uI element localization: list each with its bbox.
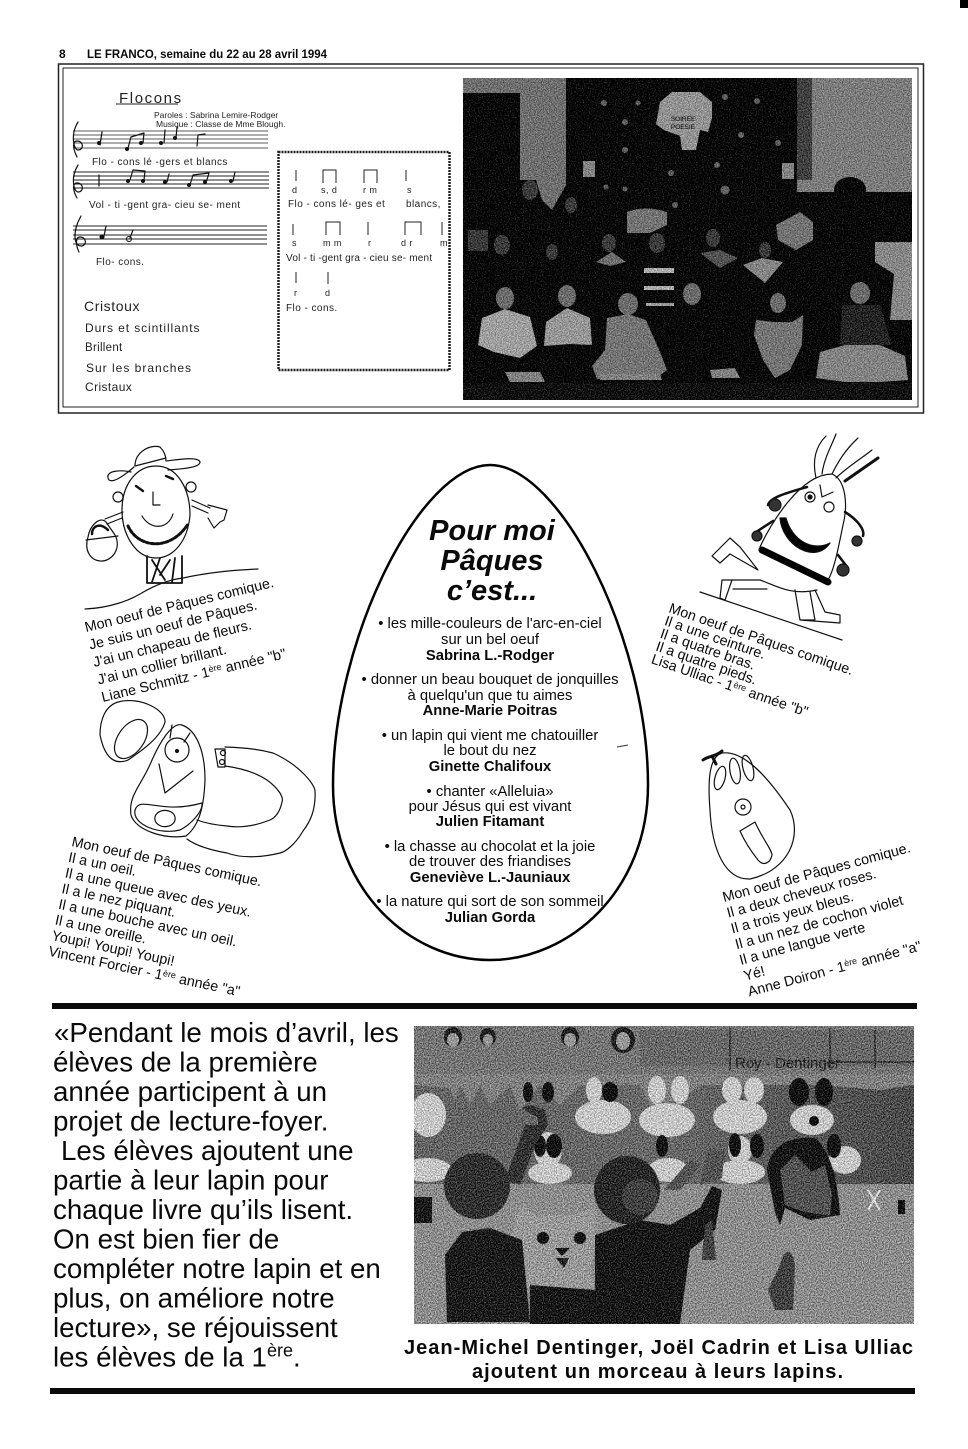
belt [762,550,828,582]
poem: Liane Schmitz: J'ai un collier brillant. [96,642,228,688]
article text [53,1017,399,1372]
upper wall band [414,1026,914,1074]
poem: Lisa Ulliac: ère [732,680,748,693]
article text: «Pendant le mois d’avril, les [54,1017,399,1048]
centre child [530,1186,722,1324]
poem: Cristaux [84,298,200,394]
poem: Vincent Forcier: Vincent Forcier - 1 [47,944,164,984]
entry: Anne-Marie: à quelqu'un que tu aimes [408,688,572,704]
lyrics line 1: Flo - cons lé -gers et blancs [92,157,228,168]
head [760,474,845,580]
logo shirt [468,230,488,251]
photo caption: Jean-Michel Dentinger, Joël Cadrin et Lisa Ulliac [404,1337,913,1359]
page header: LE FRANCO, semaine du 22 au 28 avril 1994 [87,47,327,61]
nose [735,799,751,815]
entry: Julien: • chanter «Alleluia» [427,784,553,800]
poem: Lisa Ulliac: Il a une ceinture. [662,613,767,663]
page header: 8 [59,47,66,61]
big ear [100,701,165,762]
egg drawing: Anne [703,751,794,879]
egg drawing: Vincent [100,701,315,857]
poem: Cristaux: Sur les branches [86,361,192,375]
egg head [709,753,794,879]
poem: Lisa Ulliac: Mon oeuf de Pâques comique. [667,601,855,679]
stripes [644,268,674,273]
mouth [135,803,202,831]
poem: Cristaux: Cristaux [85,380,132,394]
solfege box: Vol - ti -gent gra - cieu se- ment [286,253,432,264]
tongue [740,822,772,863]
face [142,492,173,526]
photo: children adding pieces to rabbits [402,1026,914,1324]
article text: compléter notre lapin et en [53,1253,381,1284]
solfege box: m m [323,238,342,248]
entry: Ginette: Ginette Chalifoux [429,759,552,775]
lower wall [414,1184,914,1324]
poem: Liane Schmitz [83,575,292,706]
entry: Geneviève: Geneviève L.-Jauniaux [410,870,571,886]
head [122,466,190,558]
poem: Liane Schmitz: Je suis un oeuf de Pâques. [87,598,259,653]
ground line [85,569,258,609]
backdrop stars and snowflake [656,92,712,150]
entry: Sabrina: • les mille-couleurs de l'arc-en-ciel [378,616,602,632]
article text: On est bien fier de [53,1224,279,1254]
poem: Lisa Ulliac: Il a quatre pieds. [654,639,759,688]
song title: Flocons [119,90,183,107]
entry: Sabrina: sur un bel oeuf [441,632,540,648]
egg heading: Pour moi [429,515,556,547]
eyes, nose [805,492,815,502]
entry: Julian: • la nature qui sort de son sommeil [376,894,604,910]
egg heading: c’est... [447,575,537,607]
poem: Vincent Forcier: ère [162,968,177,981]
legs [147,556,182,583]
eye and nose [165,738,189,762]
left child [445,1228,530,1322]
poem: Anne Doiron: ère [843,956,858,969]
three eyes [712,765,728,791]
song credits: Musique : Classe de Mme Blough. [156,119,285,129]
poem: Vincent Forcier: Il a le nez piquant. [60,881,177,921]
photo: children adding pieces to rabbits: Roy - Dentinger [735,1055,840,1072]
music staff 1 [73,122,268,157]
poem: Liane Schmitz: Mon oeuf de Pâques comique. [83,575,276,636]
poem: Cristaux: Durs et scintillants [85,321,200,335]
rabbit ears and bow ties [523,1078,841,1158]
poem: Vincent Forcier [47,834,265,1000]
entry: Ginette [382,728,598,775]
left wall [520,78,566,210]
entry: Julian [376,894,604,926]
article text: année participent à un [53,1076,327,1107]
poem: Anne Doiron: année "a" [856,939,923,971]
entry: Anne-Marie: Anne-Marie Poitras [423,703,557,719]
music staff 3 [73,216,267,252]
right wall [797,78,912,192]
hair [814,434,872,478]
egg outline [333,465,648,960]
entry: Julien: Julien Fitamant [436,814,544,830]
head [131,725,205,837]
entry: Geneviève: • la chasse au chocolat et la joie [385,839,595,855]
poem: Liane Schmitz: J'ai un chapeau de fleurs. [92,617,253,671]
poem: Vincent Forcier: Il a une bouche avec un oeil. [57,897,238,950]
poem: Lisa Ulliac: Il a quatre bras. [658,626,757,674]
photo caption [404,1337,913,1383]
egg heading: Pâques [440,545,544,577]
poem: Anne Doiron: Il a trois yeux bleus. [729,889,856,937]
poem: Vincent Forcier: année "a" [174,971,241,1000]
poem: Liane Schmitz: ère [207,662,222,674]
bottom rule [50,1388,915,1394]
ground line [700,592,842,640]
song credits [154,110,285,129]
rabbits [402,1076,861,1184]
portraits row [444,1027,635,1053]
solfege box: Flo - cons. [286,303,338,314]
panel: song and class photo frame [58,64,924,413]
photo caption: ajoutent un morceau à leurs lapins. [472,1361,843,1383]
solfege box: r m [363,185,377,195]
egg drawing: Liane [85,446,258,609]
entry: Geneviève: de trouver des friandises [409,854,571,870]
lyrics line 2: Vol - ti -gent gra- cieu se- ment [89,200,241,211]
article text: élèves de la première [53,1046,318,1078]
photo: class in front of Soirée Poésie backdrop [463,78,912,400]
poem: Liane Schmitz: année "b" [220,646,288,677]
poem: Anne Doiron: Mon oeuf de Pâques comique. [721,840,912,906]
music staff 2 [73,165,269,198]
poem: Lisa Ulliac [649,601,855,730]
poem: Lisa Ulliac: année "b" [743,684,810,720]
upper-row clothes [627,208,667,233]
hair tuft [703,751,722,764]
egg heading [429,515,556,607]
entry: Anne-Marie [362,672,618,719]
panel: Easter egg list [333,465,648,960]
solfege box: s [407,185,412,195]
front-row clothes [478,309,537,358]
article text: ère [267,1340,293,1360]
article text: plus, on améliore notre [53,1282,335,1314]
lyrics line 3: Flo- cons. [96,257,144,268]
entry: Sabrina: Sabrina L.-Rodger [426,648,554,664]
poem: Anne Doiron: Il a deux cheveux roses. [725,866,878,922]
entry: Ginette: le bout du nez [444,743,536,759]
solfege box: d [325,288,330,298]
article text: lecture», se réjouissent [53,1312,338,1343]
solfege box: Flo - cons lé- ges et [288,199,385,210]
article text: . [293,1342,301,1372]
poem: Anne Doiron: Il a un nez de cochon violet [734,893,905,953]
solfege box: r [368,238,371,248]
poem: Vincent Forcier: Il a une oreille. [54,913,148,948]
entry: Ginette: • un lapin qui vient me chatouiller [382,728,598,744]
poem: Anne Doiron: Il a une langue verte [738,920,867,969]
entry: Julien: pour Jésus qui est vivant [409,799,571,815]
solfege box: d r [401,238,413,248]
poem: Lisa Ulliac: Lisa Ulliac - 1 [649,652,735,695]
cat [510,1205,597,1288]
article text: projet de lecture-foyer. [53,1106,328,1136]
carrot row [414,1085,914,1185]
solfege box: d [292,185,297,195]
faces [494,180,771,260]
poem: Anne Doiron: Yé! [742,964,767,985]
song credits: Paroles : Sabrina Lemire-Rodger [154,110,278,120]
entry: Julian: Julian Gorda [445,910,536,926]
photo: class in front of Soirée Poésie backdrop: POÉSIE [671,122,696,131]
solfege box: blancs, [406,199,441,210]
arms and basket [105,500,227,528]
poem: Vincent Forcier: Youpi! Youpi! Youpi! [50,928,176,970]
corner registration mark [960,0,968,8]
solfege box [278,152,450,370]
solfege box: s [292,238,297,248]
solfege box: s, d [321,185,337,195]
egg on wall [768,1252,795,1310]
tail tip with eyes [215,749,225,767]
solfege box: m [440,238,448,248]
poem: Vincent Forcier: Il a un oeil. [67,850,138,880]
poem: Anne Doiron: Anne Doiron - 1 [746,959,847,1000]
egg drawing: Lisa [700,434,878,640]
tail [187,747,315,857]
poem: Cristaux: Brillent [85,342,123,354]
poem: Vincent Forcier: Il a une queue avec des yeux. [64,866,253,921]
mouth [780,518,830,552]
poem: Liane Schmitz: Liane Schmitz - 1 [100,665,211,706]
entry: Julien [409,784,571,830]
legs [712,538,840,623]
photo: class in front of Soirée Poésie backdrop: SOIRÉE [671,114,696,123]
top rule [52,1003,917,1009]
hat [108,446,200,481]
entry: Geneviève [385,839,595,886]
girl [767,1138,840,1225]
entry: Sabrina [378,616,602,664]
poem: Cristaux: Cristoux [84,298,140,314]
pigtails [753,487,807,534]
entry: Anne-Marie: • donner un beau bouquet de jonquilles [362,672,618,688]
necklace [128,524,188,544]
article text: chaque livre qu’ils lisent. [53,1194,353,1225]
solfege box: r [294,288,297,298]
article text: partie à leur lapin pour [53,1164,329,1196]
article text: Les élèves ajoutent une [61,1135,353,1166]
poem: Vincent Forcier: Mon oeuf de Pâques comique. [70,834,263,890]
poem: Anne Doiron [721,840,938,1000]
article text: les élèves de la 1 [53,1342,267,1372]
